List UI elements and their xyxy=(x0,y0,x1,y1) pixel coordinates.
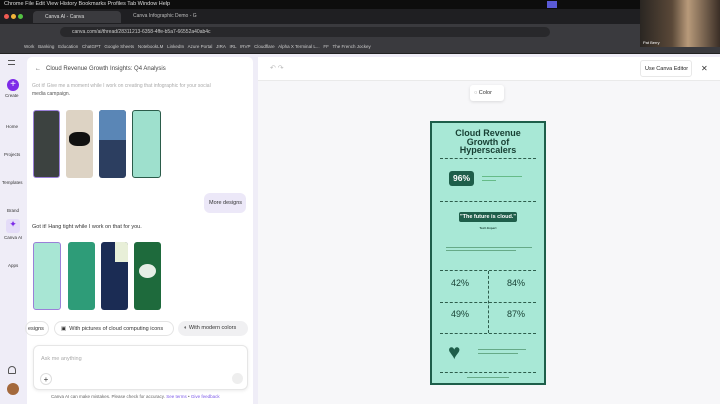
left sidebar xyxy=(2,60,23,395)
canvas header: ↶ ↷ xyxy=(270,65,284,72)
bookmarks bar: Work Banking Education ChatGPT Google Sheets NotebookLM LinkedIn Azure Portal JIRA IRL IRVP Cloudflare Alpha X Terminal L... FF The French Jockey xyxy=(24,44,371,49)
left sidebar: + xyxy=(10,79,16,90)
icon: heart: ♥ xyxy=(448,341,460,364)
left sidebar: Templates xyxy=(2,180,23,185)
quote xyxy=(459,212,517,222)
canvas header xyxy=(258,57,720,81)
chat panel: media campaign. xyxy=(32,91,70,97)
chat header: ← Cloud Revenue Growth Insights: Q4 Analysis xyxy=(35,66,166,72)
suggestion chips: ▣ With pictures of cloud computing icons xyxy=(61,326,163,332)
stats grid xyxy=(488,271,489,333)
infographic: 42% xyxy=(451,278,469,288)
color button: ◌ Color xyxy=(474,90,492,96)
mac menu bar xyxy=(0,0,720,9)
suggestion chips xyxy=(25,321,248,336)
chat panel: Got it! Hang tight while I work on that for you. xyxy=(32,224,142,230)
title: Growth of xyxy=(467,136,509,146)
canvas panel xyxy=(258,57,720,404)
thumbnails row 2 xyxy=(33,242,161,310)
stat 96% xyxy=(449,171,474,186)
address bar xyxy=(0,24,720,40)
tab bar: Canva AI - Canva xyxy=(45,14,84,20)
infographic: 84% xyxy=(507,278,525,288)
title: Cloud Revenue xyxy=(455,128,521,138)
bookmarks bar xyxy=(0,40,720,54)
webcam overlay: Pat Berry xyxy=(643,40,660,45)
left sidebar: Brand xyxy=(7,208,19,213)
infographic xyxy=(430,121,546,385)
infographic: 49% xyxy=(451,309,469,319)
input box: Ask me anything xyxy=(41,356,82,362)
stat 96%: 96% xyxy=(453,173,470,183)
tab bar xyxy=(0,9,720,24)
left sidebar: Projects xyxy=(4,152,20,157)
user message bubble: More designs xyxy=(209,200,242,206)
suggestion chips: ◐ With modern colors xyxy=(184,325,236,331)
title: Hyperscalers xyxy=(460,145,516,155)
quote: "The future is cloud." xyxy=(460,214,516,220)
address bar: canva.com/ai/thread/28311213-6358-4ffe-b5a7-66552a40ab4c xyxy=(72,29,211,35)
thumbnails row 1 xyxy=(33,110,161,178)
mac menu bar: Chrome File Edit View History Bookmarks Profiles Tab Window Help xyxy=(4,1,170,7)
infographic: 87% xyxy=(507,309,525,319)
left sidebar: ✦ xyxy=(9,219,17,229)
chat panel: Got it! Give me a moment while I work on creating that infographic for your social xyxy=(32,83,211,89)
input box: + xyxy=(44,375,48,384)
input box xyxy=(33,345,248,390)
left sidebar: Apps xyxy=(8,263,18,268)
canvas header: ✕ xyxy=(701,64,708,73)
user message bubble xyxy=(204,193,246,213)
tab bar: Canva Infographic Demo - G xyxy=(133,13,197,19)
left sidebar: Canva AI xyxy=(4,235,22,240)
webcam overlay xyxy=(640,0,720,47)
suggestion chips: esigns xyxy=(28,326,44,332)
left sidebar: Home xyxy=(6,124,18,129)
title xyxy=(455,128,521,155)
left sidebar: Create xyxy=(5,93,19,98)
body text xyxy=(446,247,532,248)
canvas header: Use Canva Editor xyxy=(645,66,688,72)
infographic: Tech Expert xyxy=(480,226,496,230)
chat panel xyxy=(27,57,253,404)
chat panel: Canva AI can make mistakes. Please check for accuracy. See terms • Give feedback xyxy=(51,394,220,399)
color button xyxy=(470,85,504,101)
